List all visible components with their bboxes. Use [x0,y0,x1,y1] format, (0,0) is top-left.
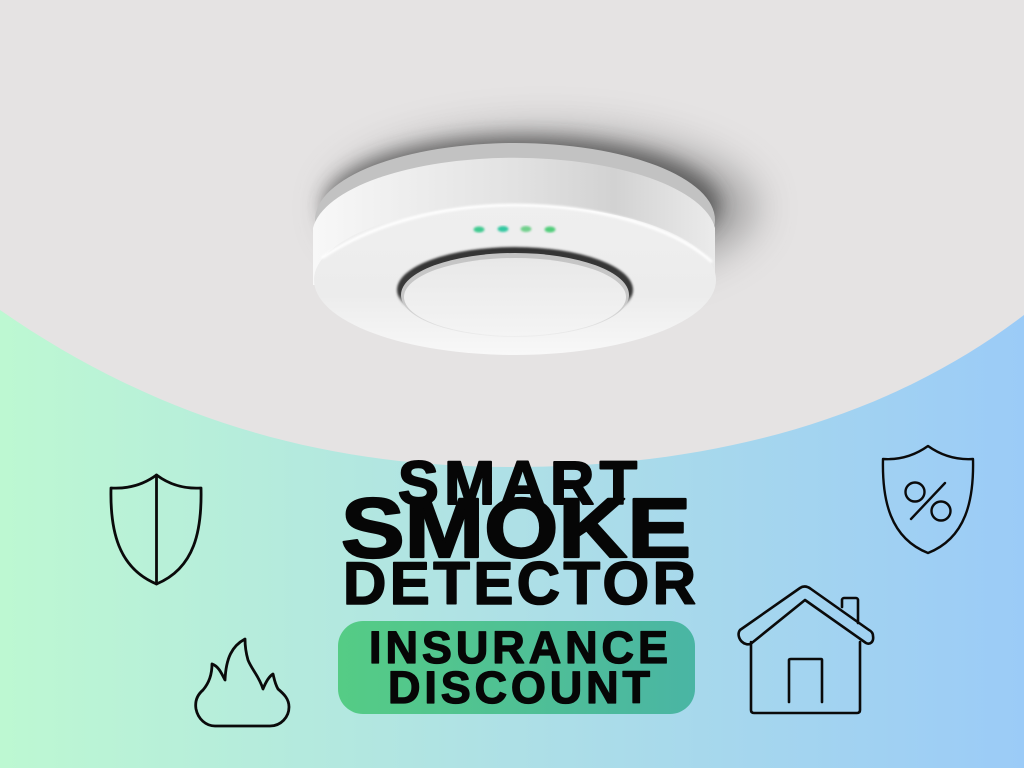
face highlight edge [322,205,712,262]
curved ceiling [0,0,1024,467]
wide cast shadow on ceiling [333,130,757,286]
icon: split shield [111,475,201,584]
badge text: INSURANCE: INSURANCE [369,622,668,673]
detector front face [314,205,716,355]
title line: SMART: SMART [398,449,637,517]
status LEDs [474,226,556,232]
sensor lip [401,253,629,337]
tight cast shadow on ceiling [324,137,720,273]
title line: DETECTOR: DETECTOR [343,550,696,617]
badge: insurance discount [338,621,695,714]
icon: flame [196,639,289,726]
icon: percent shield [883,446,973,553]
sensor button [404,258,626,336]
badge pill [338,621,695,714]
title line: SMOKE: SMOKE [341,481,691,575]
title [341,449,696,617]
smoke detector device [313,130,757,355]
detector rim back edge [315,143,715,297]
icon: house [739,587,873,713]
sensor dark ring [397,247,633,333]
detector side band [313,158,715,285]
badge text: DISCOUNT: DISCOUNT [388,662,650,713]
